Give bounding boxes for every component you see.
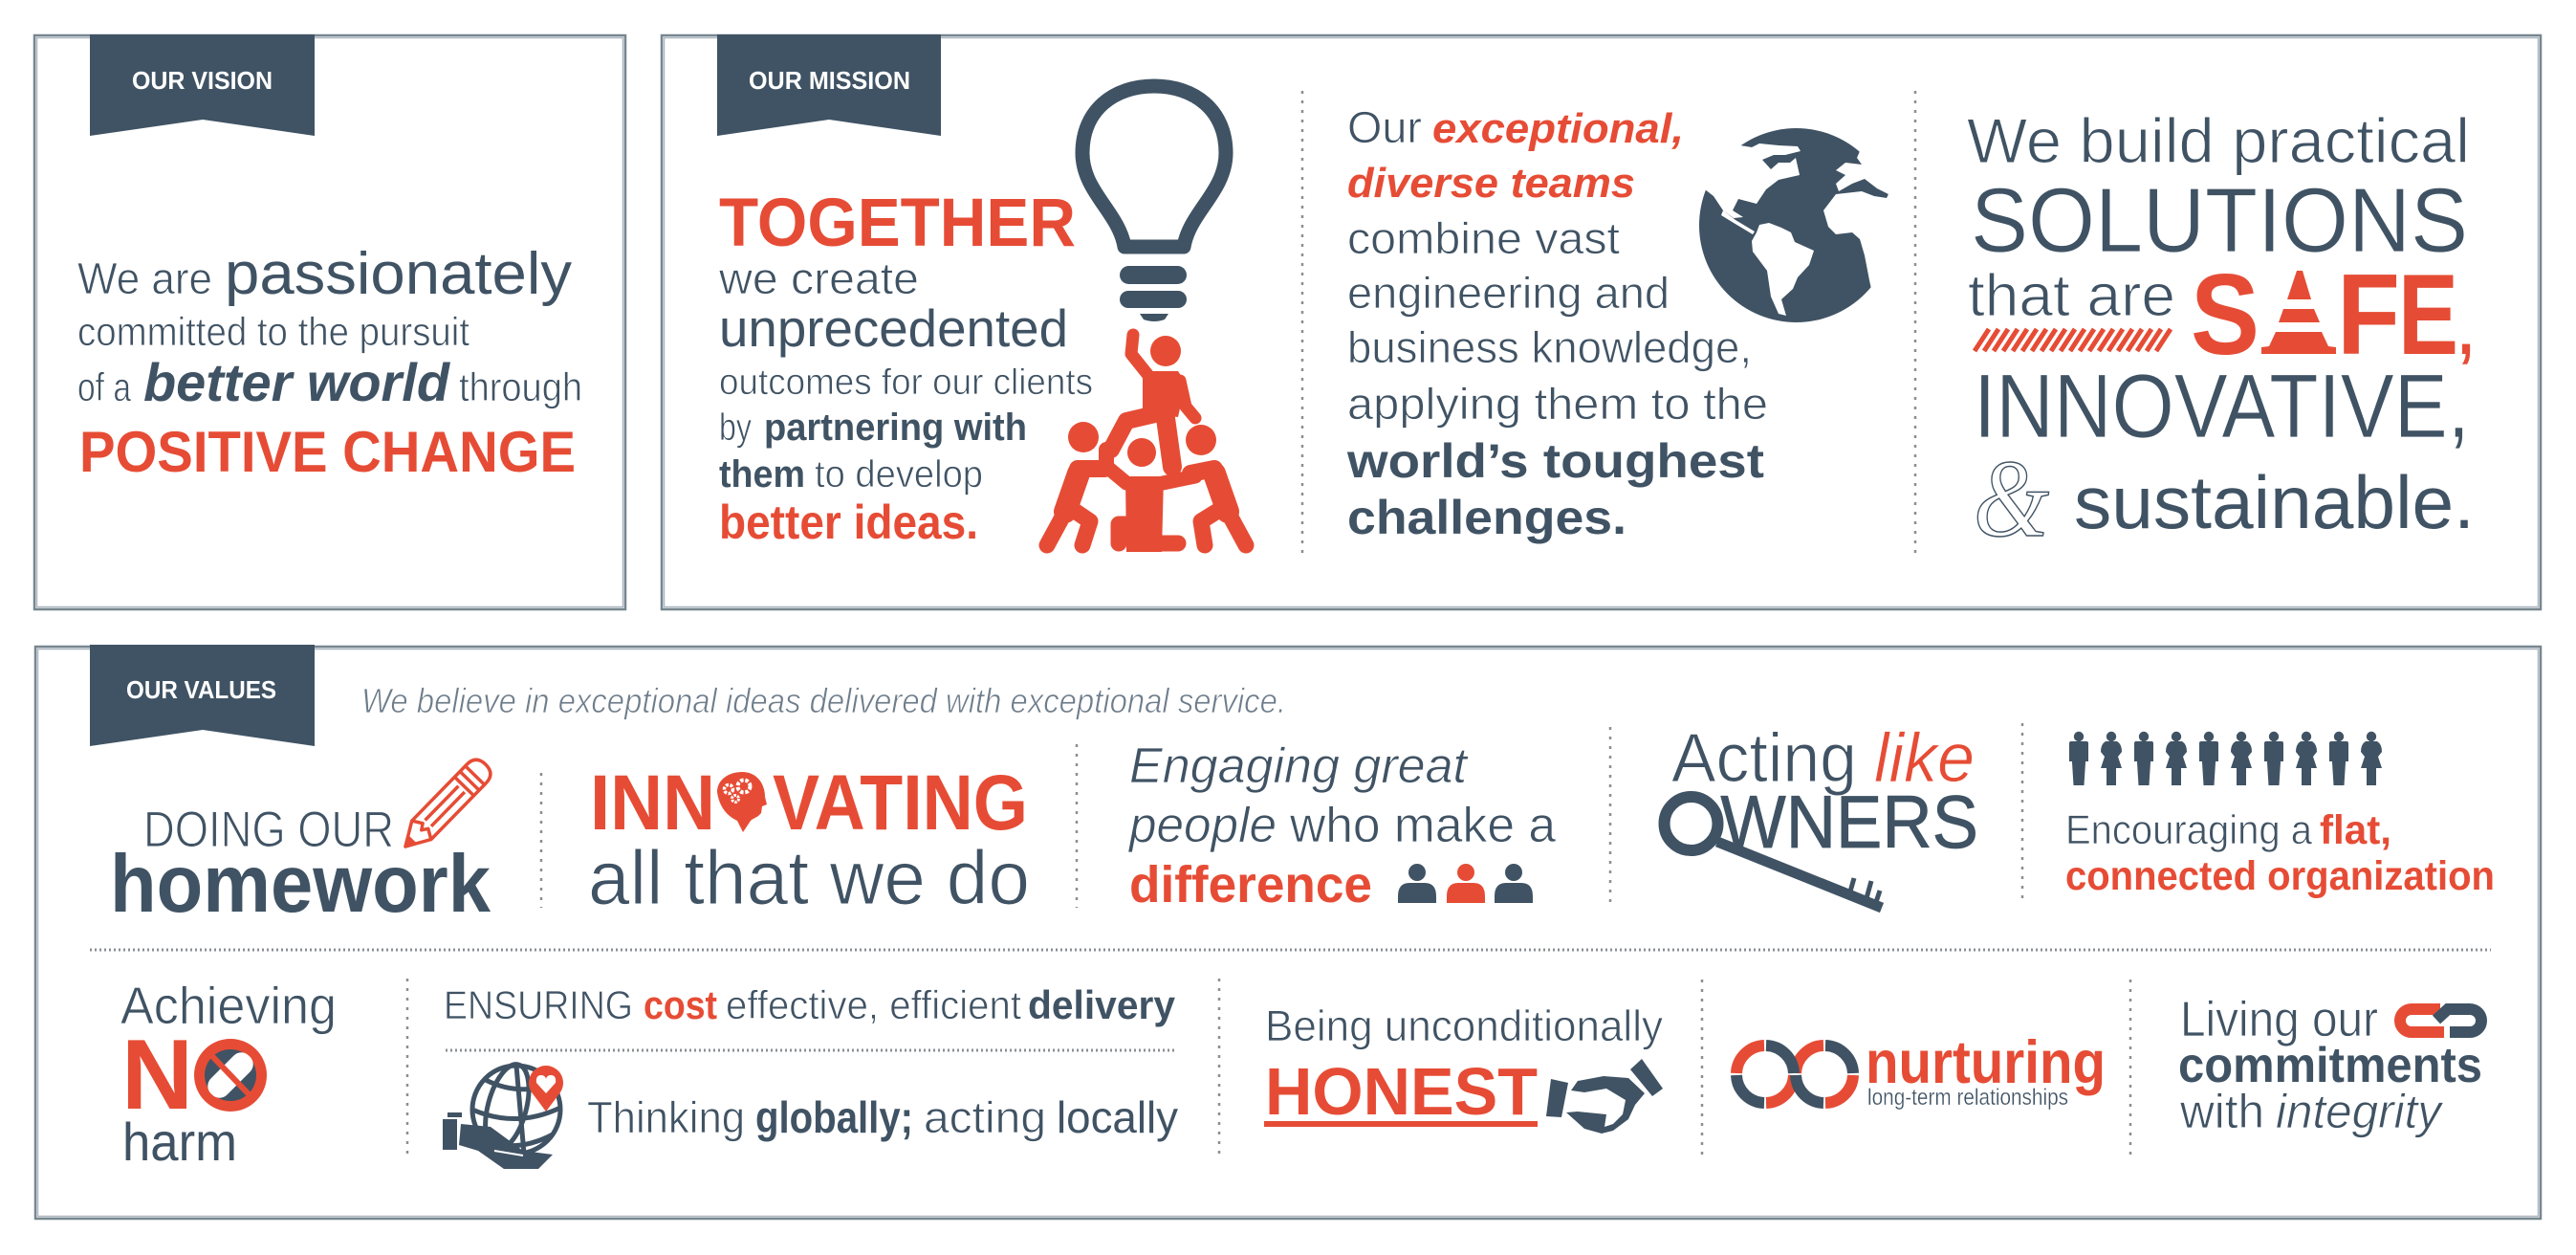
mission text: together: better ideas. xyxy=(719,495,978,549)
mission text: practical solutions: , xyxy=(2458,294,2474,368)
icon: safety cone as letter A xyxy=(2261,271,2336,354)
value: innovating all that we do: VATING xyxy=(773,760,1028,847)
mission text: diverse teams: combine vast xyxy=(1347,213,1620,263)
value: flat connected organization: Encouraging a xyxy=(2065,807,2312,853)
mission text: together: them xyxy=(719,453,805,495)
value: ensuring cost effective delivery: effective, efficient xyxy=(726,982,1021,1027)
value: engaging great people xyxy=(1127,738,1556,914)
icon: infinity rings xyxy=(1736,1046,1853,1103)
ribbon: our mission: OUR MISSION xyxy=(749,66,910,95)
value: nurturing long-term relationships: long-term relationships xyxy=(1867,1085,2068,1111)
vision statement: through xyxy=(459,364,582,409)
mission text: together: to develop xyxy=(815,453,983,495)
mission text: practical solutions: E xyxy=(2398,251,2458,379)
icon: globe in hand with heart pin xyxy=(443,1060,563,1169)
value: acting like owners: Acting xyxy=(1671,720,1857,797)
value: engaging great people: Engaging great xyxy=(1129,738,1470,794)
divider xyxy=(1076,744,1078,908)
mission text: together: unprecedented xyxy=(719,298,1068,358)
value: nurturing long-term relationships xyxy=(1736,1029,2106,1111)
value: innovating all that we do xyxy=(588,760,1030,920)
mission text: diverse teams: engineering and xyxy=(1347,268,1670,318)
value: acting like owners: OWNERS xyxy=(1667,780,1978,864)
value: doing our homework xyxy=(110,755,495,930)
value: achieving no harm: N xyxy=(121,1020,193,1131)
value: acting like owners: like xyxy=(1874,720,1975,797)
value: ensuring cost effective delivery: ENSURING xyxy=(444,982,633,1027)
ribbon: our values: OUR VALUES xyxy=(126,675,276,704)
mission text: practical solutions: sustainable. xyxy=(2074,460,2475,544)
icon: three people xyxy=(1398,864,1533,903)
divider xyxy=(1701,980,1703,1158)
mission text: together: outcomes for our clients xyxy=(719,363,1093,403)
mission text: practical solutions: SOLUTIONS xyxy=(1971,169,2468,272)
divider xyxy=(1609,727,1611,908)
vision statement xyxy=(77,241,582,484)
panel: our values xyxy=(35,645,2541,1219)
divider xyxy=(1218,979,1220,1158)
value: being unconditionally honest: HONEST xyxy=(1265,1054,1538,1129)
value: engaging great people: who make a xyxy=(1289,798,1556,853)
value: innovating all that we do: all that we do xyxy=(588,835,1030,920)
divider xyxy=(406,979,408,1158)
mission text: diverse teams: diverse teams xyxy=(1347,160,1635,207)
icon: globe xyxy=(1685,115,1905,327)
mission text: diverse teams: exceptional, xyxy=(1432,105,1684,152)
icon: team human pyramid xyxy=(1047,335,1246,552)
vision statement: of a xyxy=(77,364,132,409)
vision statement: better world xyxy=(143,352,451,412)
mission text: diverse teams xyxy=(1346,102,1768,544)
icon: pencil xyxy=(396,755,495,856)
mission text: together: we create xyxy=(718,253,919,303)
value: achieving no harm: harm xyxy=(122,1112,237,1172)
ribbon: our vision xyxy=(90,34,315,136)
value: thinking globally acting locally: locally xyxy=(1057,1092,1178,1142)
value: engaging great people: people xyxy=(1127,798,1277,853)
divider xyxy=(2129,980,2131,1158)
value: living our commitments with integrity xyxy=(2178,992,2482,1138)
value: flat connected organization: connected organization xyxy=(2065,853,2495,899)
value: engaging great people: difference xyxy=(1129,856,1372,914)
mission text: practical solutions xyxy=(1967,105,2475,560)
value: living our commitments with integrity: with xyxy=(2179,1085,2264,1138)
vision statement: passionately xyxy=(225,241,572,307)
value: ensuring cost effective delivery: cost xyxy=(644,982,717,1027)
value: flat connected organization: flat, xyxy=(2320,807,2391,853)
vision statement: POSITIVE CHANGE xyxy=(79,420,576,484)
mission text: practical solutions: that are xyxy=(1968,263,2175,329)
hatch under that are xyxy=(1975,329,2171,351)
panel: our mission xyxy=(662,34,2541,609)
value: achieving no harm xyxy=(120,976,337,1172)
mission text: together: by xyxy=(719,407,752,449)
value: achieving no harm: Achieving xyxy=(120,976,337,1035)
vision statement: We are xyxy=(77,253,212,303)
icon: handshake xyxy=(1546,1059,1663,1134)
mission text: together: TOGETHER xyxy=(719,186,1076,261)
divider xyxy=(1301,91,1303,554)
icon: head with gears xyxy=(717,772,767,832)
value: innovating all that we do: INN xyxy=(590,760,715,847)
mission text: practical solutions: & xyxy=(1974,438,2049,560)
icon: light bulb xyxy=(1082,86,1226,321)
ribbon: our mission xyxy=(717,34,941,136)
mission text: practical solutions: INNOVATIVE, xyxy=(1974,356,2470,457)
divider xyxy=(2021,723,2023,898)
value: being unconditionally honest xyxy=(1264,1002,1663,1134)
value: flat connected organization xyxy=(2065,732,2495,899)
value: thinking globally acting locally: globally; xyxy=(755,1092,913,1142)
mission text: practical solutions: We build practical xyxy=(1967,105,2470,176)
value: thinking globally acting locally xyxy=(443,1060,1178,1169)
icon: key forming the letter O xyxy=(1664,797,1882,908)
panel: our vision xyxy=(34,34,625,609)
value: nurturing long-term relationships: nurturing xyxy=(1866,1029,2106,1096)
values tagline: We believe in exceptional ideas delivered with exceptional service. xyxy=(361,681,1286,720)
mission text: practical solutions: S xyxy=(2191,251,2259,379)
ribbon: our vision: OUR VISION xyxy=(132,66,273,95)
value: doing our homework: homework xyxy=(110,839,491,930)
vision statement: committed to the pursuit xyxy=(77,309,469,354)
mission text: together: partnering with xyxy=(764,407,1027,449)
icon: prohibited bandage as letter O xyxy=(194,1039,267,1112)
divider xyxy=(1914,91,1916,554)
mission text: diverse teams: challenges. xyxy=(1347,491,1626,544)
value: ensuring cost effective delivery xyxy=(444,982,1176,1027)
icon: chain link xyxy=(2400,1009,2481,1032)
value: thinking globally acting locally: Thinking xyxy=(587,1092,745,1142)
divider xyxy=(540,773,542,908)
mission text: diverse teams: applying them to the xyxy=(1347,379,1768,429)
value: being unconditionally honest: Being unconditionally xyxy=(1265,1002,1663,1050)
value: living our commitments with integrity: commitments xyxy=(2178,1038,2482,1093)
value: doing our homework: DOING OUR xyxy=(143,802,394,858)
value: living our commitments with integrity: integrity xyxy=(2276,1085,2444,1138)
mission text: diverse teams: Our xyxy=(1347,102,1422,152)
mission text: practical solutions: F xyxy=(2337,251,2400,379)
value: ensuring cost effective delivery: delivery xyxy=(1028,982,1176,1027)
value: acting like owners xyxy=(1664,720,1978,908)
ribbon: our values xyxy=(90,645,315,746)
value: living our commitments with integrity: Living our xyxy=(2180,992,2378,1047)
icon: row of ten people xyxy=(2069,732,2382,785)
mission text: together xyxy=(718,186,1093,549)
mission text: diverse teams: world’s toughest xyxy=(1346,434,1764,488)
mission text: diverse teams: business knowledge, xyxy=(1347,322,1752,372)
value: thinking globally acting locally: acting xyxy=(924,1092,1046,1142)
